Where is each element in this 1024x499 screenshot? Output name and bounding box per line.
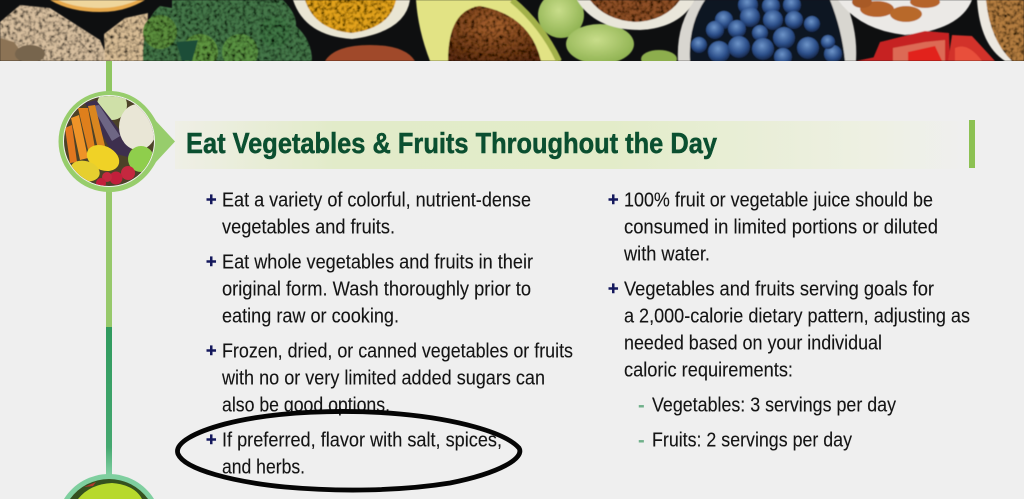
bullet: serving goals: +: [608, 278, 619, 298]
header photo of assorted foods: [0, 0, 1024, 61]
bullet: whole vegetables: [206, 252, 533, 328]
sub-bullet: vegetables servings: -: [638, 394, 645, 416]
bullet: juice: with water.: [623, 244, 710, 266]
bullet: serving goals: needed based on your individual: [624, 332, 882, 354]
bullet: whole vegetables: eating raw or cooking.: [222, 306, 399, 328]
bullet: flavor: and herbs.: [222, 456, 305, 478]
bullet: frozen, dried, canned: also be good options.: [222, 394, 390, 416]
hand-drawn ellipse callout: [178, 411, 520, 490]
title: Eat Vegetables & Fruits Throughout the Day: [186, 128, 717, 160]
bullet: frozen, dried, canned: [206, 340, 573, 416]
bullet: flavor: [206, 430, 502, 478]
sub-bullet: fruits servings: Fruits: 2 servings per day: [652, 430, 853, 452]
bullet: juice: 100% fruit or vegetable juice should be: [624, 190, 933, 212]
bullet: frozen, dried, canned: +: [206, 340, 217, 360]
bullet: juice: [608, 190, 938, 266]
bullet: whole vegetables: Eat whole vegetables and fruits in their: [222, 252, 533, 274]
bullet: serving goals: caloric requirements:: [624, 360, 793, 382]
sub-bullet: fruits servings: -: [638, 430, 645, 452]
bullet: serving goals: [608, 278, 970, 382]
bullet: juice: consumed in limited portions or diluted: [624, 216, 938, 238]
title banner: [175, 121, 970, 169]
bullet: frozen, dried, canned: with no or very limited added sugars can: [221, 368, 545, 390]
sub-bullet: vegetables servings: Vegetables: 3 servings per day: [652, 394, 897, 416]
vertical timeline line: [106, 61, 112, 477]
bullet: variety: +: [206, 190, 217, 210]
banner end bar: [969, 120, 975, 168]
right column bullet list: [608, 190, 970, 452]
bullet: variety: vegetables and fruits.: [222, 216, 395, 238]
bullet: flavor: If preferred, flavor with salt, spices,: [222, 430, 502, 452]
bullet: whole vegetables: original form. Wash thoroughly prior to: [222, 278, 531, 300]
bullet: whole vegetables: +: [206, 252, 217, 272]
bullet: frozen, dried, canned: Frozen, dried, or canned vegetables or fruits: [222, 340, 573, 362]
icon: vegetables and fruits medallion: [59, 90, 175, 192]
bullet: flavor: +: [206, 430, 217, 450]
bullet: juice: +: [608, 190, 619, 210]
bullet: variety: [206, 190, 531, 238]
icon: next section medallion: [64, 474, 154, 499]
left column bullet list: [206, 190, 573, 478]
bullet: variety: Eat a variety of colorful, nutrient-dense: [222, 190, 531, 212]
bullet: serving goals: a 2,000-calorie dietary pattern, adjusting as: [624, 306, 970, 328]
bullet: serving goals: Vegetables and fruits serving goals for: [624, 278, 934, 300]
